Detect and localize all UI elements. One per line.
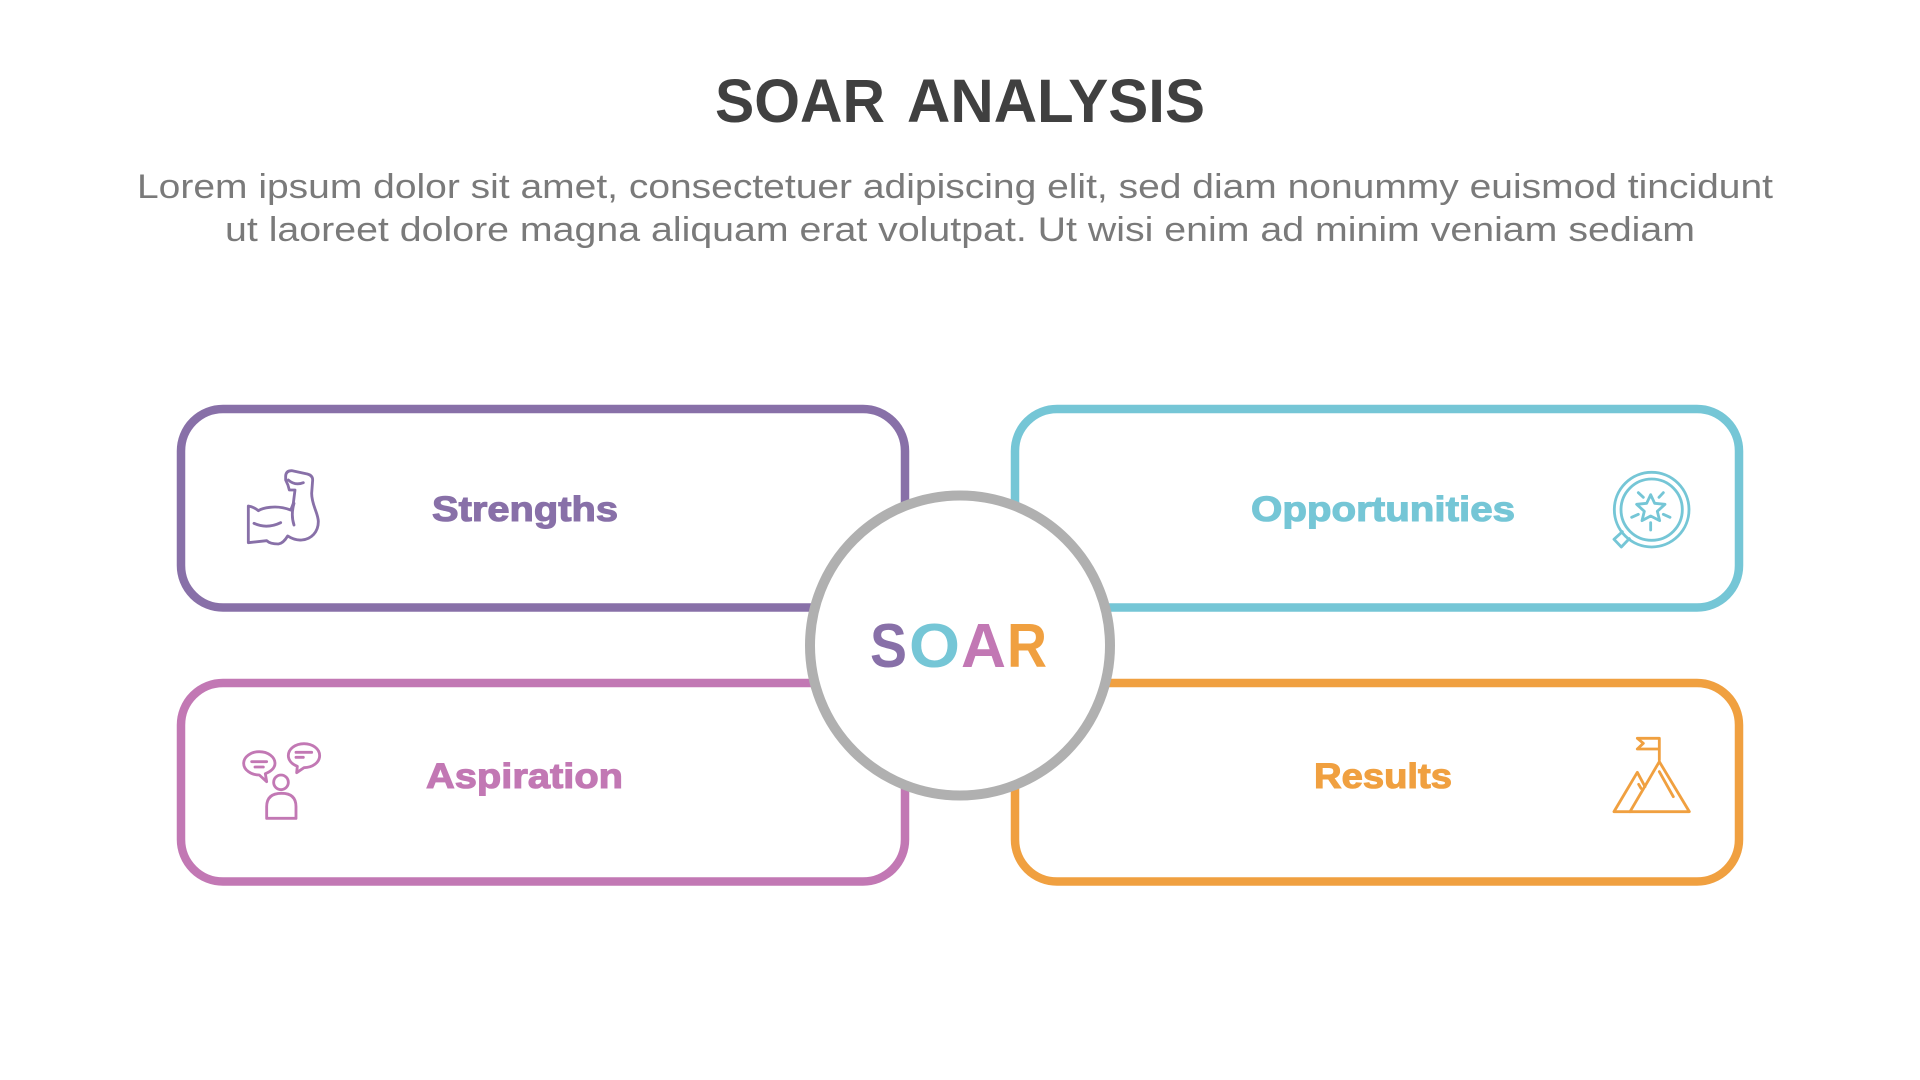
title: SOAR xyxy=(715,67,885,135)
panel: strengths xyxy=(181,409,905,608)
subtitle text block: Lorem ipsum dolor sit amet, consectetuer adipiscing elit, sed diam nonummy euismod tincidunt xyxy=(137,168,1773,206)
panel outline: aspiration xyxy=(181,683,905,882)
subtitle text block: ut laoreet dolore magna aliquam erat volutpat. Ut wisi enim ad minim veniam sediam xyxy=(225,211,1695,249)
panel: aspiration xyxy=(181,683,905,882)
title: ANALYSIS xyxy=(907,67,1205,135)
label: results: Results xyxy=(1314,757,1452,796)
word: SOAR: S xyxy=(870,612,907,681)
word: SOAR: R xyxy=(1007,612,1047,681)
label: opportunities: Opportunities xyxy=(1251,490,1515,529)
word: SOAR: O xyxy=(909,612,960,681)
panel outline: opportunities xyxy=(1015,409,1739,608)
panel outline: results xyxy=(1015,683,1739,882)
word: SOAR xyxy=(870,612,1047,681)
center circle: SOAR xyxy=(810,496,1110,796)
icon: person with speech bubbles xyxy=(244,744,320,818)
circle ring xyxy=(810,496,1110,796)
word: SOAR: A xyxy=(961,612,1006,681)
label: strengths: Strengths xyxy=(432,490,618,529)
label: aspiration: Aspiration xyxy=(426,757,623,796)
icon: magnifier star xyxy=(1614,472,1689,547)
panel: opportunities xyxy=(1015,409,1739,608)
panel outline: strengths xyxy=(181,409,905,608)
icon: flexed arm xyxy=(248,471,318,544)
icon: mountain with flag xyxy=(1614,738,1689,812)
panel: results xyxy=(1015,683,1739,882)
title xyxy=(715,67,1205,135)
subtitle text block xyxy=(137,168,1773,249)
